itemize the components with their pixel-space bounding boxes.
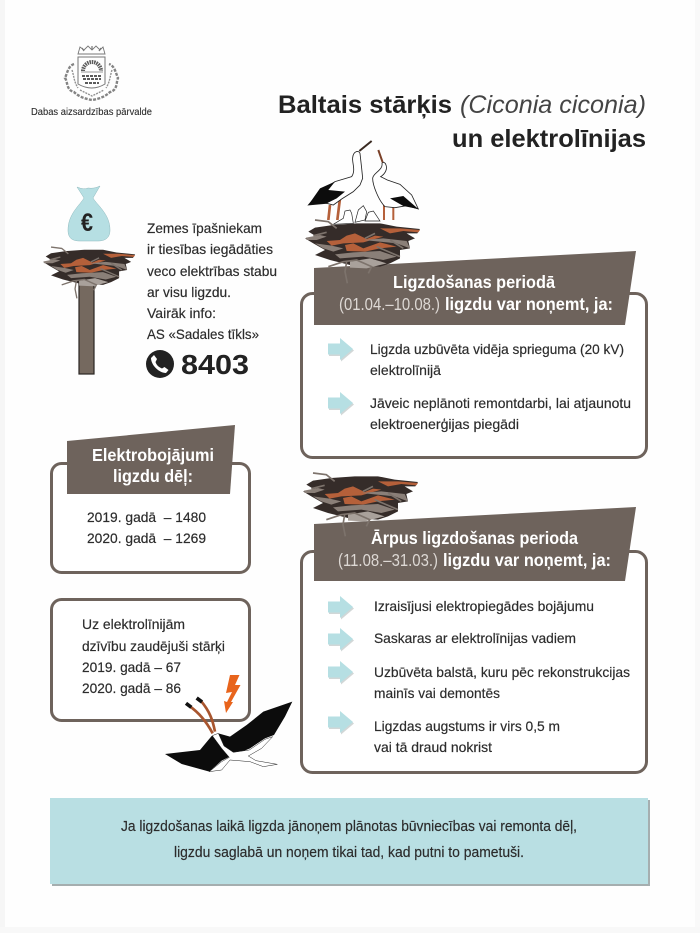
banner: outside nesting heading [314, 507, 636, 581]
icon: lightning bolt [224, 675, 240, 713]
icon: empty nest [303, 473, 418, 536]
panel: stork deaths: dzīvību zaudējuši stārķi [82, 638, 225, 654]
banner: nesting period heading: ligzdu var noņemt, ja: [445, 294, 613, 314]
icon: phone [146, 350, 174, 378]
logo caption: Dabas aizsardzības pārvalde [31, 107, 152, 118]
banner: outside nesting heading: ligzdu var noņemt, ja: [443, 550, 611, 570]
panel: outside nesting period: Uzbūvēta balstā, kuru pēc rekonstrukcijas [374, 664, 630, 680]
icon: arrow [328, 628, 354, 652]
banner: outside nesting heading: Ārpus ligzdošanas perioda [371, 528, 578, 548]
icon: arrow [328, 392, 354, 416]
title: Baltais stārķis [278, 91, 452, 119]
panel: stork deaths: Uz elektrolīnijām [82, 616, 185, 632]
panel: nesting period: Jāveic neplānoti remontdarbi, lai atjaunotu [370, 395, 631, 411]
icon: money bag: € [81, 209, 93, 237]
panel: outside nesting period: mainīs vai demontēs [374, 685, 500, 701]
panel: stork deaths: 2019. gadā – 67 [82, 659, 181, 675]
panel: outside nesting period [302, 552, 646, 772]
icon: arrow [328, 661, 354, 684]
panel: nesting period: Ligzda uzbūvēta vidēja sprieguma (20 kV) [370, 341, 624, 357]
text: land owner note [147, 220, 277, 342]
panel: damage stats: 2019. gadā – 1480 [87, 509, 206, 525]
text: land owner note: ir tiesības iegādāties [147, 241, 273, 257]
text: land owner note: Vairāk info: [147, 305, 216, 321]
panel: damage stats: 2020. gadā – 1269 [87, 530, 206, 546]
icon: coat of arms logo [65, 46, 118, 100]
icon: nest on pole [43, 247, 135, 374]
icon: arrow [328, 596, 354, 620]
text: land owner note: veco elektrības stabu [147, 263, 277, 279]
panel: stork deaths: 2020. gadā – 86 [82, 680, 181, 696]
panel: stork deaths [52, 600, 250, 720]
text: land owner note: ar visu ligzdu. [147, 284, 231, 300]
phone number: 8403 [181, 349, 249, 380]
panel: nesting period: elektrolīnijā [370, 362, 441, 378]
title: (Ciconia ciconia) [460, 91, 646, 119]
panel: damage stats [52, 425, 250, 572]
panel: nesting period: elektroenerģijas piegādi [370, 416, 519, 432]
banner: damage heading [67, 425, 235, 494]
panel: outside nesting period: vai tā draud nokrist [374, 739, 492, 755]
icon: electrocuted stork [165, 698, 292, 772]
panel: outside nesting period: Izraisījusi elektropiegādes bojājumu [374, 598, 594, 614]
banner: damage heading: ligzdu dēļ: [113, 466, 193, 486]
callout: bottom note: Ja ligzdošanas laikā ligzda jānoņem plānotas būvniecības vai remonta dēļ, [121, 818, 577, 835]
title [278, 91, 646, 153]
text: land owner note: AS «Sadales tīkls» [147, 326, 259, 342]
callout: bottom note [50, 798, 650, 886]
text: land owner note: Zemes īpašniekam [147, 220, 262, 236]
icon: arrow [328, 711, 354, 734]
panel: nesting period [302, 294, 646, 458]
callout: bottom note: ligzdu saglabā un noņem tikai tad, kad putni to pametuši. [174, 844, 524, 861]
panel: outside nesting period: Saskaras ar elektrolīnijas vadiem [374, 630, 576, 646]
banner: damage heading: Elektrobojājumi [92, 445, 214, 465]
panel: outside nesting period: Ligzdas augstums ir virs 0,5 m [374, 718, 560, 734]
icon: storks on nest [305, 141, 420, 283]
banner: outside nesting heading: (11.08.–31.03.) [338, 550, 438, 570]
banner: nesting period heading: (01.04.–10.08.) [339, 294, 440, 314]
icon: money bag [68, 186, 110, 241]
title: un elektrolīnijas [452, 125, 646, 153]
banner: nesting period heading: Ligzdošanas periodā [393, 272, 555, 292]
icon: arrow [328, 338, 354, 362]
banner: nesting period heading [314, 251, 636, 325]
